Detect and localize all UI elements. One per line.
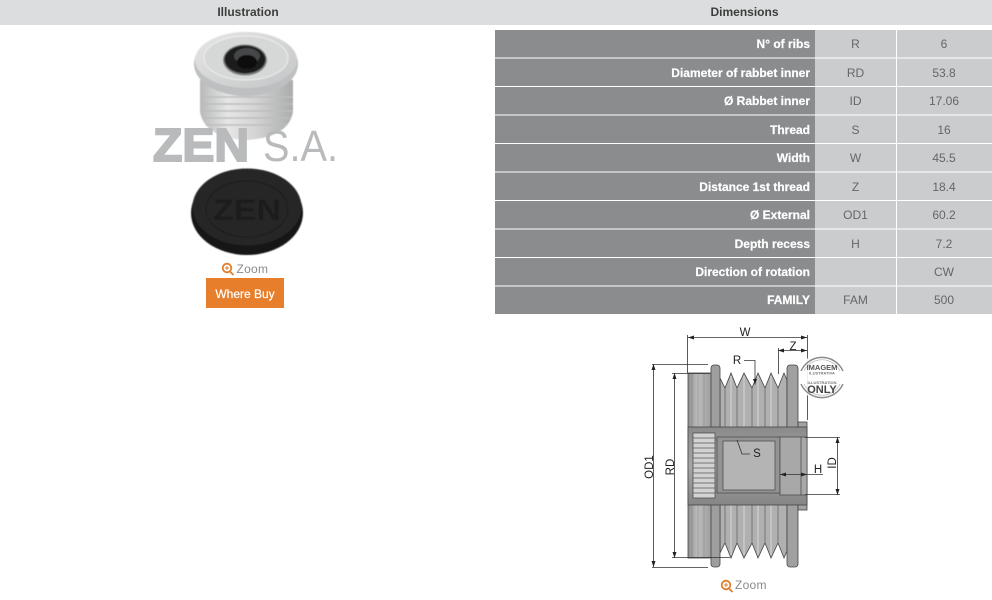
- row: Width: Width: [777, 151, 810, 165]
- row: Direction of rotation: CW: [934, 265, 955, 279]
- row: Thread: 16: [937, 123, 951, 137]
- stamp: Imagem ilustrativa / illustration only: ILUSTRATIVA: [809, 370, 835, 376]
- logo: ZEN S.A.: [153, 119, 338, 171]
- button: Where Buy: [206, 278, 284, 308]
- stamp: Imagem ilustrativa / illustration only: ILLUSTRATION: [807, 380, 837, 385]
- icon: magnifier: [722, 581, 732, 592]
- row: Diameter of rabbet inner: Diameter of rabbet inner: [671, 66, 810, 80]
- link: Zoom under photo: Zoom: [236, 262, 268, 276]
- row: Distance 1st thread: Distance 1st thread: [699, 180, 810, 194]
- row: Ø Rabbet inner: ID: [850, 94, 862, 108]
- row: Ø External: OD1: [843, 208, 868, 222]
- icon: black cap: [191, 168, 303, 255]
- dimension labels: OD1: [644, 455, 656, 479]
- pulley body: [688, 365, 807, 567]
- row: Distance 1st thread: 18.4: [932, 180, 956, 194]
- dimension lines: [652, 335, 840, 568]
- row: Distance 1st thread: [495, 172, 992, 200]
- dimension labels: W: [740, 327, 751, 339]
- dimensions table: [495, 30, 992, 314]
- dimension labels: ID: [827, 457, 839, 469]
- icon: black cap: ZEN: [213, 194, 281, 227]
- stamp: Imagem ilustrativa / illustration only: ONLY: [807, 384, 837, 396]
- row: Width: 45.5: [932, 151, 956, 165]
- dimension labels: [644, 327, 839, 479]
- row: Width: W: [850, 151, 862, 165]
- button: Where Buy: Where Buy: [215, 287, 275, 301]
- logo: ZEN S.A.: S.A.: [263, 122, 338, 171]
- row: FAMILY: [495, 286, 992, 314]
- row: Ø External: 60.2: [932, 208, 956, 222]
- header bar: Illustration and Dimensions: [0, 0, 992, 25]
- row: Distance 1st thread: Z: [852, 180, 859, 194]
- dimension labels: H: [814, 464, 822, 476]
- dimension labels: R: [733, 355, 741, 367]
- row: Direction of rotation: Direction of rotation: [695, 265, 810, 279]
- row: Diameter of rabbet inner: [495, 58, 992, 86]
- row: Thread: [495, 116, 992, 143]
- row: Depth recess: H: [851, 237, 860, 251]
- icon: magnifier: [223, 264, 234, 275]
- row: N° of ribs: R: [851, 37, 860, 51]
- row: Depth recess: Depth recess: [735, 237, 810, 251]
- dimension labels: Z: [789, 341, 797, 353]
- row: Ø Rabbet inner: [495, 87, 992, 114]
- dimension labels: RD: [665, 459, 677, 475]
- row: FAMILY: FAMILY: [767, 293, 810, 307]
- row: Direction of rotation: [495, 258, 992, 286]
- row: Ø Rabbet inner: 17.06: [929, 94, 959, 108]
- row: FAMILY: FAM: [843, 293, 868, 307]
- link: Zoom under diagram: Zoom: [735, 578, 766, 592]
- row: Ø Rabbet inner: Ø Rabbet inner: [724, 94, 810, 108]
- heading: Illustration: Illustration: [217, 5, 279, 19]
- row: Width: [495, 144, 992, 172]
- row: Depth recess: [495, 230, 992, 257]
- row: N° of ribs: [495, 30, 992, 58]
- product image: pulley with logo and cap: [153, 32, 338, 255]
- row: Diameter of rabbet inner: RD: [847, 66, 864, 80]
- row: FAMILY: 500: [934, 293, 954, 307]
- row: Diameter of rabbet inner: 53.8: [932, 66, 956, 80]
- stamp: Imagem ilustrativa / illustration only: IMAGEM: [807, 363, 837, 372]
- row: N° of ribs: 6: [941, 37, 948, 51]
- row: Thread: Thread: [770, 123, 810, 137]
- stamp: Imagem ilustrativa / illustration only: [798, 354, 846, 400]
- dimension labels: S: [753, 448, 761, 460]
- row: N° of ribs: N° of ribs: [757, 37, 810, 51]
- heading: Dimensions: Dimensions: [710, 5, 779, 19]
- icon: pulley photo: [194, 32, 298, 140]
- technical diagram: pulley cross-section: [644, 327, 846, 568]
- row: Depth recess: 7.2: [936, 237, 953, 251]
- inner bore and splines: [693, 433, 807, 498]
- link: Zoom under photo: [223, 262, 268, 276]
- row: Thread: S: [851, 123, 860, 137]
- logo: ZEN S.A.: ZEN: [153, 119, 249, 171]
- row: Ø External: [495, 201, 992, 228]
- row: Ø External: Ø External: [750, 208, 810, 222]
